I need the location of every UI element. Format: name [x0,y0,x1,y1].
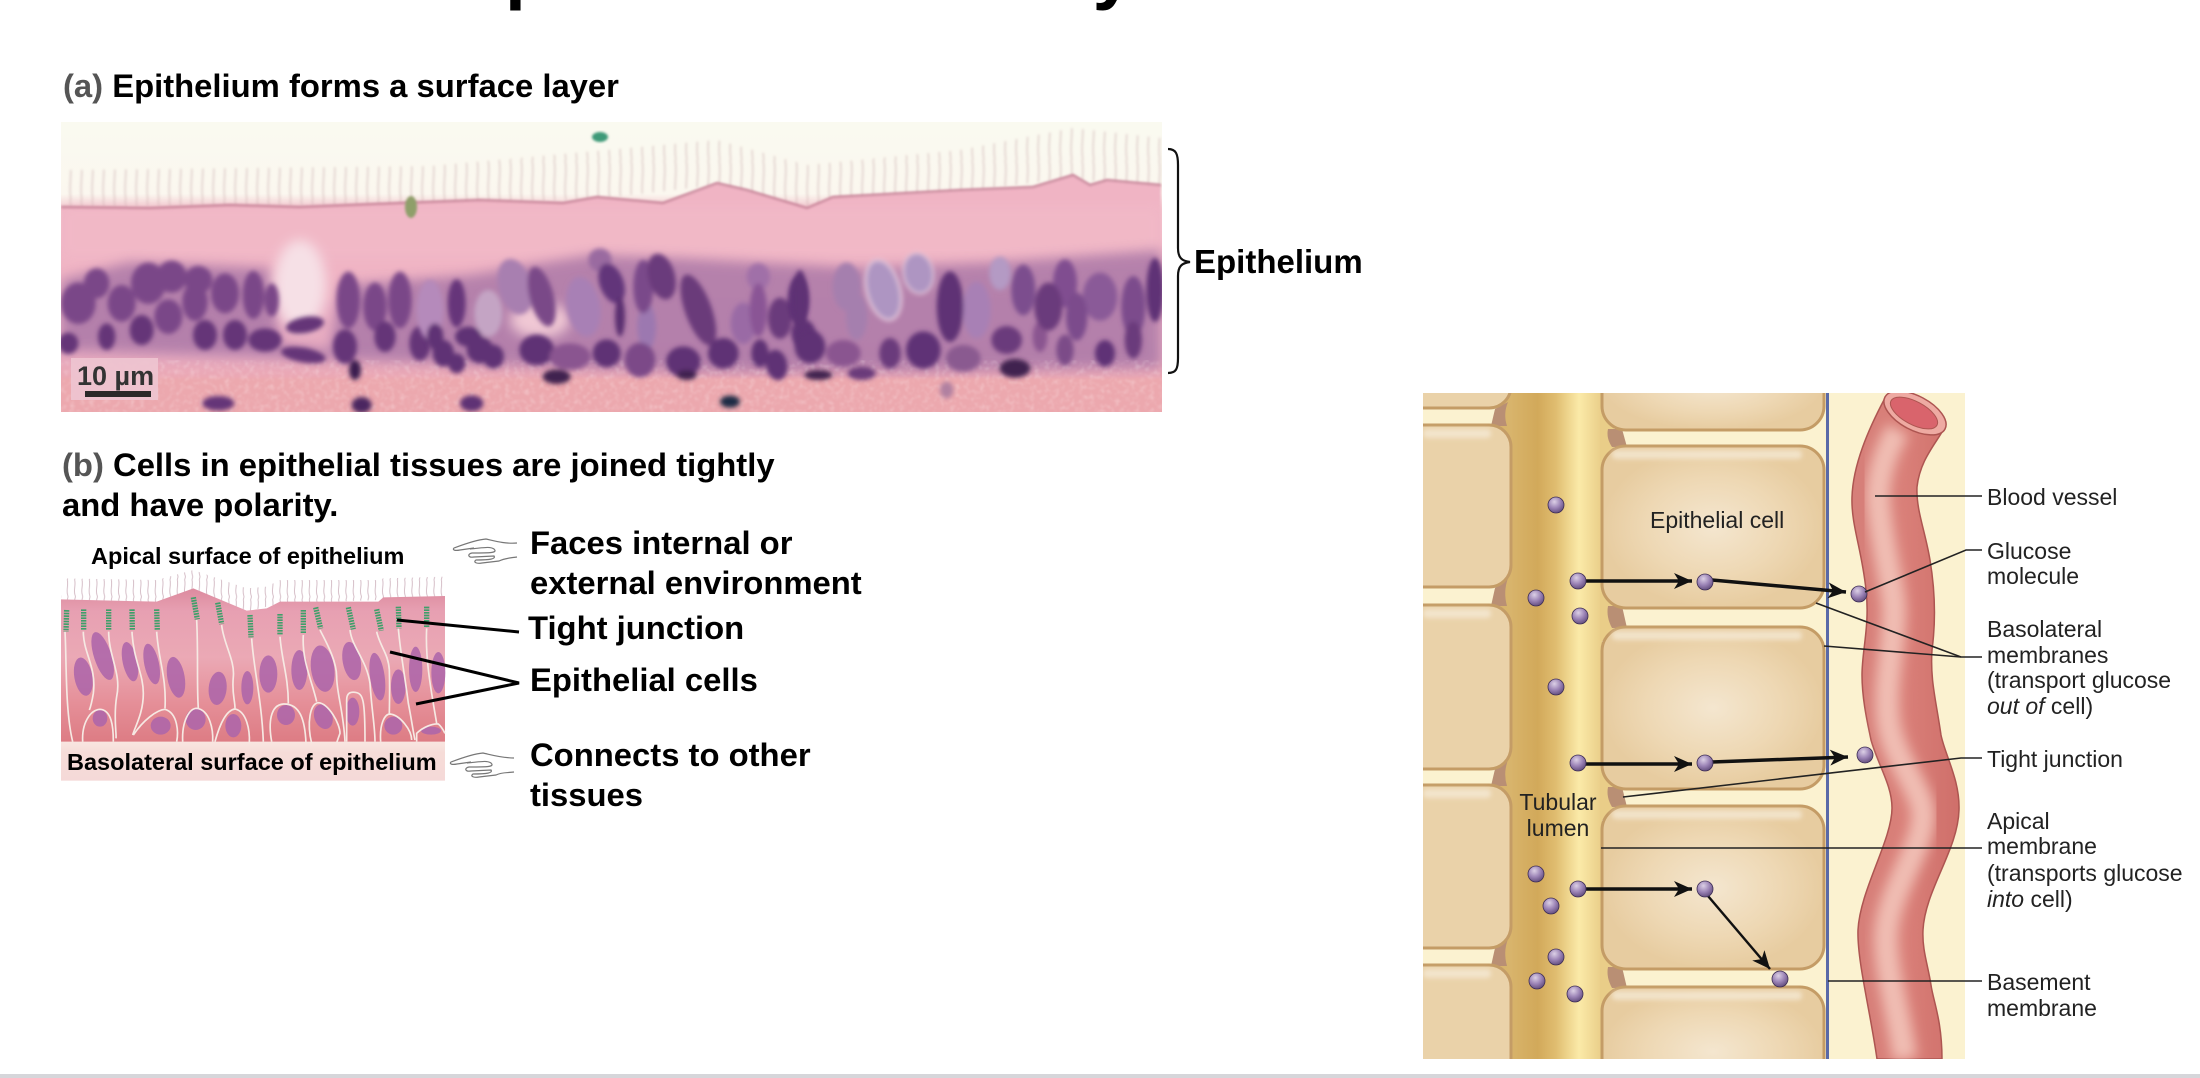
epithelial cells, right column [1602,340,1824,1078]
label: basement membrane: Basement [1987,969,2091,995]
scale bar: 10 µm [77,361,154,391]
icon: pointing hand, apical [453,539,517,563]
label: basolateral membranes: (transport glucose [1987,667,2171,693]
lumen fill at cell corners [1498,393,1614,1002]
text: faces environment: Faces internal or [530,524,792,561]
label: tubular lumen: lumen [1527,815,1589,841]
panel: micrograph of epithelium [58,122,1164,413]
label: apical membrane: (transports glucose [1987,860,2183,886]
nuclei: right third [793,250,1164,398]
label: epithelial cell: Epithelial cell [1650,507,1784,533]
label: tight junction (tubule): Tight junction [1987,746,2123,772]
arrows [1585,580,1848,969]
label: apical membrane: Apical [1987,808,2050,834]
label: blood vessel: Blood vessel [1987,484,2117,510]
lumen [1510,393,1602,1059]
blood vessel [1852,382,1959,1059]
scale bar [71,358,158,400]
panel: kidney tubule illustration [1423,393,1965,1059]
text: connects to tissues: Connects to other [530,736,811,773]
label: epithelial cells: Epithelial cells [530,661,758,698]
label: apical membrane: membrane [1987,833,2097,859]
heading: panel b: and have polarity. [62,486,338,523]
label: apical membrane: cell) [2024,886,2073,912]
label: apical membrane: into [1987,886,2024,912]
cell top highlights [1423,429,1802,1000]
tight junctions between cells [1491,402,1627,988]
leader: tight junction [397,620,519,632]
label: apical surface: Apical surface of epithelium [91,543,404,569]
label: basolateral membranes: membranes [1987,642,2108,668]
icon: pointing hand, basolateral [450,753,514,777]
diagram: epithelial cell layer [61,570,445,781]
basement membrane [1826,393,1829,1059]
leader: epithelial cells [390,652,519,704]
heading: panel a: (a) Epithelium forms a surface layer [63,67,619,104]
label: basolateral membranes: cell) [2045,693,2093,719]
label: basement membrane: membrane [1987,995,2097,1021]
nuclei: middle third [417,248,815,411]
text: faces environment: external environment [530,564,862,601]
label: Epithelium: Epithelium [1194,243,1363,280]
label: basolateral membranes: out of [1987,693,2047,719]
leader lines: tubule callouts [1601,496,1982,981]
glucose molecules [1528,497,1873,1002]
label: glucose molecule: Glucose [1987,538,2071,564]
heading: panel b: (b) Cells in epithelial tissues are joined tightly [62,446,775,483]
label: basolateral membranes: Basolateral [1987,616,2102,642]
text: connects to tissues: tissues [530,776,643,813]
label: tight junction: Tight junction [528,609,744,646]
epithelial cells, left column [1423,393,1512,1059]
brace: epithelium extent [1168,149,1190,373]
label: basolateral surface: Basolateral surface of epithelium [67,749,437,775]
label: glucose molecule: molecule [1987,563,2079,589]
bottom edge strip [0,1074,2200,1078]
label: tubular lumen: Tubular [1519,789,1597,815]
nuclei: left third [58,261,431,413]
